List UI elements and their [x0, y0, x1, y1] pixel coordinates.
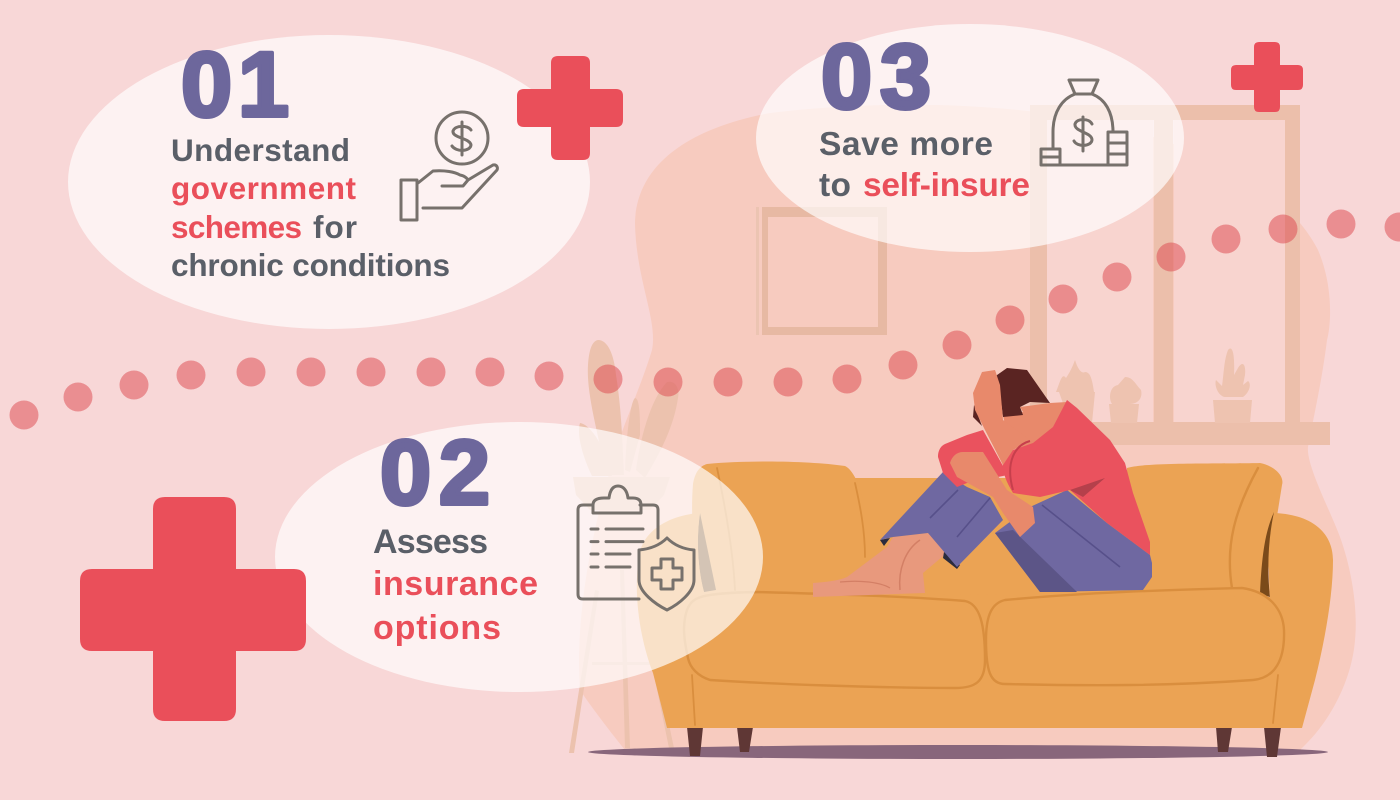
left sleeve — [938, 430, 1008, 487]
icon: coin in hand — [401, 112, 497, 220]
forearm — [950, 452, 1035, 537]
neck and face — [1003, 402, 1067, 450]
right back cushion — [1127, 463, 1282, 610]
thigh — [995, 490, 1152, 592]
number 01: 01 — [181, 34, 289, 136]
panel: step 03 — [756, 24, 1184, 252]
panel: step 01 — [68, 34, 590, 329]
icon: small red cross — [1231, 42, 1303, 112]
sofa — [637, 462, 1333, 757]
window plants — [1056, 348, 1252, 423]
step 01 text: government — [171, 170, 356, 206]
shin — [880, 472, 1003, 567]
hair — [990, 368, 1050, 417]
window — [1030, 105, 1330, 445]
floor shadow — [588, 745, 1328, 759]
hair back — [973, 405, 982, 426]
icon: money bag — [1041, 80, 1127, 165]
left back cushion — [692, 462, 868, 610]
step 03 text: self-insure — [863, 167, 1030, 204]
step 03 text: Save more — [819, 126, 993, 163]
sofa seams — [684, 588, 1284, 688]
step 03 text: to — [819, 167, 851, 204]
dotted path — [10, 210, 1400, 430]
bubble 01 — [68, 35, 590, 329]
step 02 text: options — [373, 609, 501, 647]
shirt — [1003, 400, 1150, 555]
step 02 text — [373, 523, 538, 647]
foot — [813, 533, 948, 597]
raised arm and hand — [973, 370, 1030, 465]
step 02 text: Assess — [373, 523, 488, 561]
number 03: 03 — [821, 26, 931, 128]
trouser cuffs — [880, 538, 960, 569]
icon: large red cross — [80, 497, 306, 721]
step 01 text: chronic conditions — [171, 247, 450, 283]
bubble 02 — [275, 422, 763, 692]
icon: clipboard and shield — [578, 486, 694, 610]
floor plant on stool — [569, 340, 678, 753]
step 01 text: Understand — [171, 132, 350, 168]
picture frame — [756, 207, 887, 335]
thigh shadow — [995, 530, 1077, 592]
number 02: 02 — [380, 422, 490, 524]
step 03 text — [819, 126, 1030, 204]
step 01 text — [171, 132, 450, 283]
person — [813, 368, 1152, 597]
panel: step 02 — [275, 422, 763, 692]
sofa body — [637, 513, 1333, 728]
step 01 text: schemes — [171, 209, 302, 245]
room backdrop blob — [579, 105, 1356, 750]
sofa legs — [687, 727, 1281, 757]
sofa arm gap — [1260, 512, 1274, 597]
bubble 03 — [756, 24, 1184, 252]
step 02 text: insurance — [373, 565, 538, 603]
step 01 text: for — [313, 209, 357, 245]
icon: medium red cross — [517, 56, 623, 160]
